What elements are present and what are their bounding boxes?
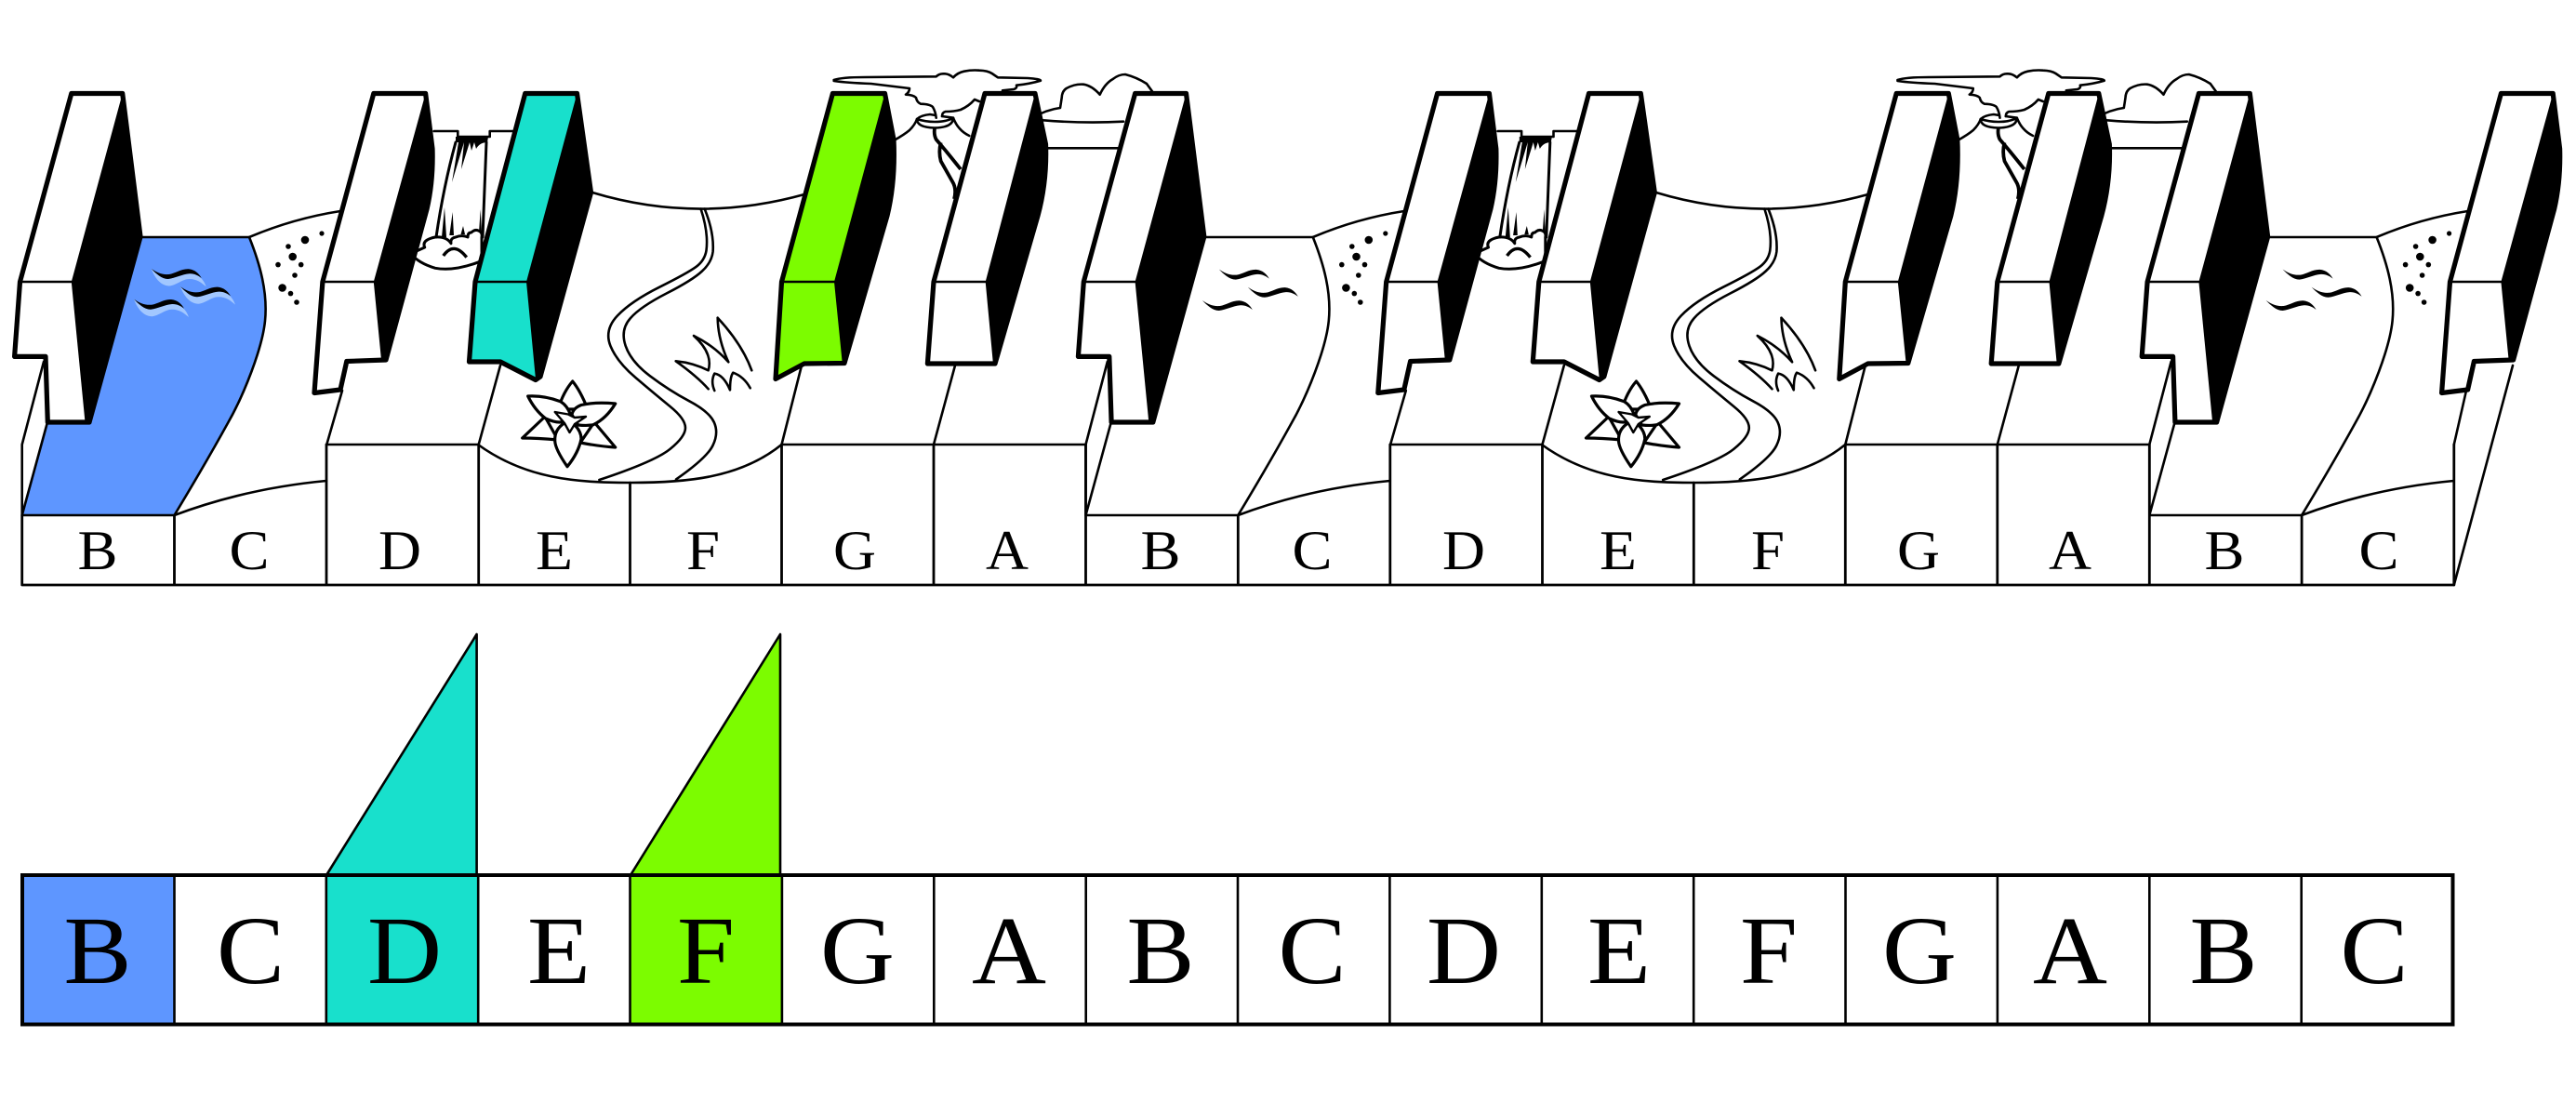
raised key 8 — [1533, 93, 1654, 379]
raised key 1 — [15, 93, 140, 422]
strip note labels: B — [2189, 897, 2258, 1004]
key note labels: B — [78, 520, 117, 581]
key note labels: B — [1140, 520, 1181, 581]
key note labels: F — [1751, 520, 1785, 581]
strip note labels: A — [2033, 897, 2107, 1004]
raised key 3: teal — [469, 93, 591, 379]
key note labels: C — [229, 520, 270, 581]
key note labels: G — [833, 520, 876, 581]
strip note labels: E — [527, 897, 591, 1004]
strip note labels: C — [217, 897, 285, 1004]
terrain: B and C, second octave — [1086, 211, 1404, 515]
strip note labels: C — [1278, 897, 1347, 1004]
raised key 4: green — [776, 93, 894, 379]
terrain: B and C, third octave — [2149, 211, 2468, 515]
key note labels — [78, 520, 2399, 581]
highlighted B cell — [22, 875, 174, 1025]
terrain: trees, second octave — [1845, 70, 2216, 445]
terrain: trees, first octave — [781, 70, 1152, 445]
key note labels: G — [1897, 520, 1940, 581]
strip note labels: G — [1882, 897, 1957, 1004]
strip border — [22, 875, 2453, 1025]
lake wave highlights — [134, 269, 235, 317]
terrain: waterfall, river, flower and grass, second octave — [1390, 131, 1868, 483]
waves, third octave — [2266, 270, 2362, 311]
highlighted D cell — [326, 875, 478, 1025]
blue lake surface on first B — [22, 237, 266, 515]
raised key 7 — [1378, 93, 1496, 392]
terrain: B and C, first octave — [22, 211, 340, 515]
strip outline and cell dividers — [175, 875, 2302, 1024]
strip note labels: C — [2340, 897, 2409, 1004]
strip note labels: A — [972, 897, 1046, 1004]
key note labels: A — [2049, 520, 2091, 581]
raised key 10 — [1991, 93, 2109, 364]
key note labels: E — [1600, 520, 1637, 581]
strip note labels: F — [677, 897, 735, 1004]
teal triangle above D — [326, 634, 477, 875]
lake waves, first octave — [134, 269, 231, 310]
raised key 11 — [2142, 93, 2268, 422]
strip note labels: G — [820, 897, 895, 1004]
key note labels: B — [2204, 520, 2245, 581]
key note labels: F — [686, 520, 720, 581]
white key cell lines — [22, 445, 2454, 585]
terrain: waterfall, river, flower and grass, first octave — [326, 131, 804, 483]
key note labels: D — [1442, 520, 1485, 581]
strip note labels: B — [63, 897, 132, 1004]
raised key 9 — [1839, 93, 1958, 379]
strip note labels: E — [1587, 897, 1651, 1004]
key note labels: A — [986, 520, 1029, 581]
raised key 5 — [927, 93, 1046, 364]
green triangle above F — [631, 634, 780, 875]
panel: landscape keyboard — [15, 70, 2560, 585]
key note labels: C — [1293, 520, 1332, 581]
waves, second octave — [1202, 270, 1298, 311]
strip note labels: F — [1740, 897, 1798, 1004]
right end face of the block — [2454, 365, 2513, 585]
panel: flat keyboard strip — [22, 634, 2453, 1025]
strip note labels: D — [1427, 897, 1501, 1004]
key note labels: D — [378, 520, 421, 581]
strip note labels: B — [1127, 897, 1194, 1004]
raised key 6 — [1078, 93, 1204, 422]
strip note labels — [63, 897, 2409, 1004]
highlighted F cell — [631, 875, 782, 1025]
raised key 2 — [314, 93, 432, 392]
key note labels: C — [2358, 520, 2399, 581]
raised key 12 — [2442, 93, 2560, 392]
key note labels: E — [536, 520, 573, 581]
strip note labels: D — [367, 897, 442, 1004]
